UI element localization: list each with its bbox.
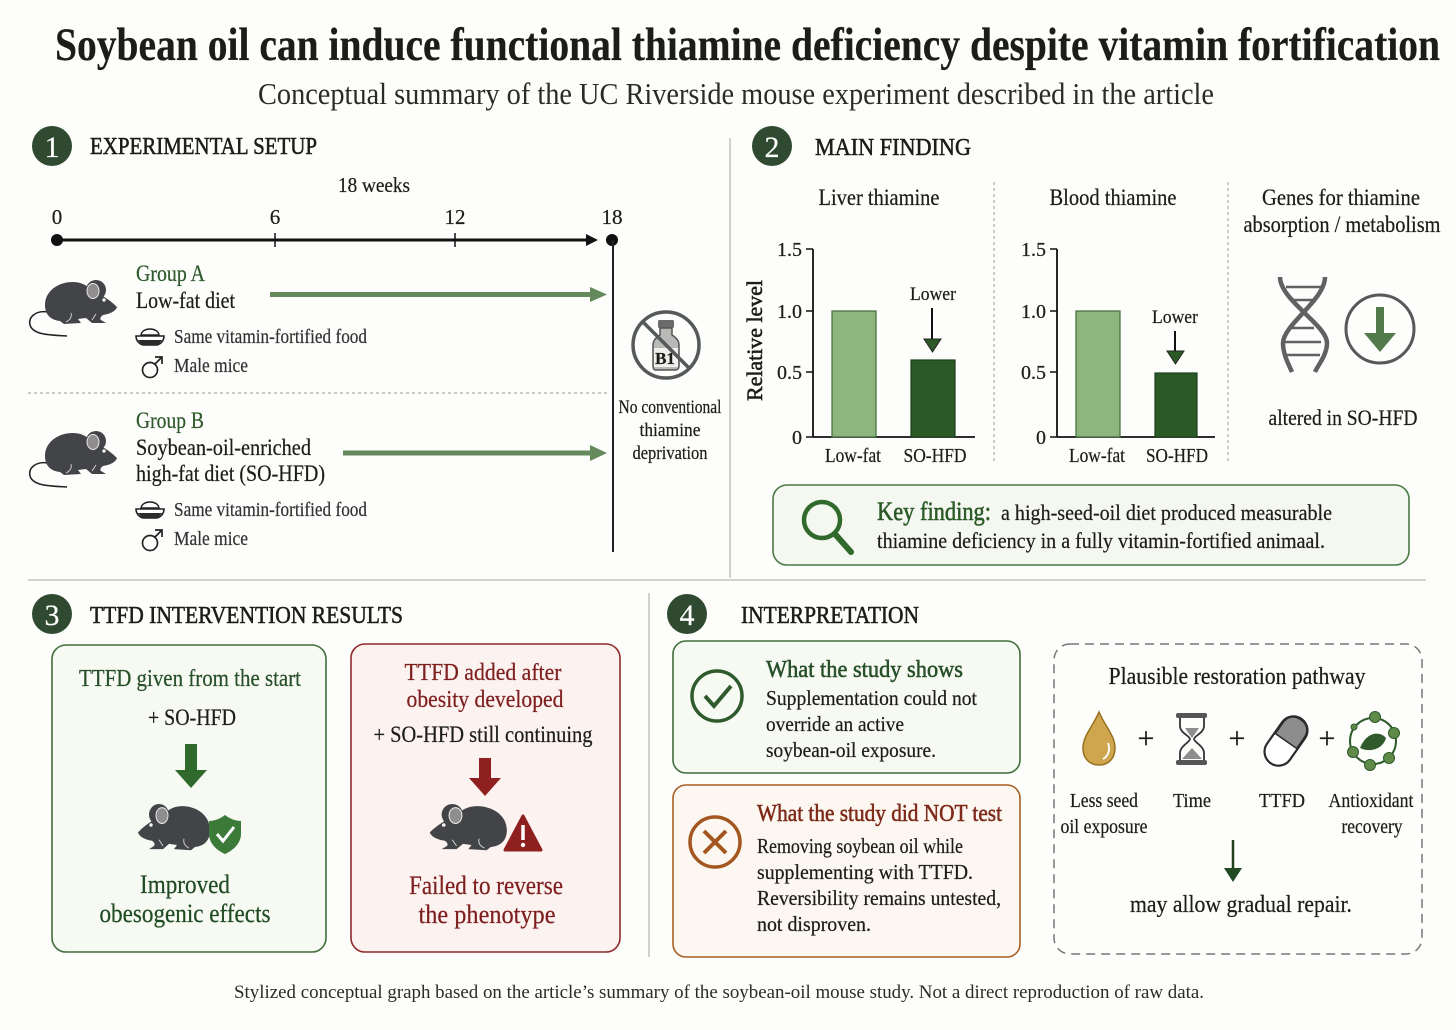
section number 4: 4 — [680, 599, 694, 632]
section number 4 — [667, 594, 707, 634]
sex note A: Male mice — [174, 355, 248, 377]
heading: main finding: MAIN FINDING — [815, 135, 971, 161]
timeline: 18 weeks — [338, 173, 410, 197]
food note A: Same vitamin-fortified food — [174, 326, 367, 348]
section number 2 — [752, 126, 792, 166]
icon: down arrow in circle — [1346, 295, 1414, 363]
note: no deprivation: deprivation — [632, 443, 708, 464]
chart: liver thiamine: 0.5 — [777, 362, 802, 384]
chart: liver thiamine: 0 — [792, 427, 802, 449]
heading: TTFD results: TTFD INTERVENTION RESULTS — [90, 603, 403, 629]
chart: blood thiamine: 0 — [1036, 427, 1046, 449]
pathway labels: Less seed — [1070, 790, 1138, 812]
arrow: group B duration — [343, 445, 607, 461]
bar: liver SO-HFD — [911, 360, 955, 437]
panel: interpretation — [667, 594, 1422, 957]
plus: + — [1138, 722, 1154, 755]
icon: DNA — [1280, 277, 1327, 372]
sex note B: Male mice — [174, 528, 248, 550]
card: TTFD after obesity — [351, 644, 620, 952]
arrow: liver lower: Lower — [910, 284, 957, 305]
note: no deprivation: thiamine — [640, 420, 700, 441]
note: no deprivation: No conventional — [618, 397, 722, 418]
icon: mouse A — [30, 280, 117, 336]
chart: blood thiamine — [1021, 185, 1215, 467]
bar: liver low-fat — [832, 311, 876, 437]
panel: main finding — [742, 126, 1441, 565]
arrow: blood lower: Lower — [1152, 307, 1199, 328]
panel: experimental setup — [28, 126, 722, 552]
group A label — [136, 261, 236, 313]
plus: + — [1229, 722, 1245, 755]
icon: cross — [690, 817, 740, 867]
card: what the study did not test: supplementing with TTFD. — [757, 860, 973, 884]
card: restoration pathway — [1054, 644, 1422, 954]
icon: capsule — [1259, 711, 1313, 771]
genes block: altered in SO-HFD — [1268, 405, 1418, 430]
group B label: Group B — [136, 408, 204, 433]
card: what the study shows: soybean-oil exposure. — [766, 738, 936, 762]
icon: no vitamin B1 — [633, 312, 699, 378]
icon: mouse with warning — [430, 804, 541, 850]
bar: blood low-fat — [1076, 311, 1120, 437]
card: restoration pathway: Plausible restoration pathway — [1108, 664, 1366, 690]
chart: liver thiamine: 1.0 — [777, 301, 802, 323]
timeline — [51, 173, 622, 552]
callout: key finding — [773, 485, 1409, 565]
group B — [30, 408, 607, 550]
timeline: 6 — [270, 205, 280, 229]
callout: key finding: thiamine deficiency in a fully vitamin-fortified animaal. — [877, 528, 1325, 553]
pathway labels: Time — [1173, 790, 1211, 812]
card: what the study shows — [673, 641, 1020, 773]
section number 1 — [32, 126, 72, 166]
food note B: Same vitamin-fortified food — [174, 499, 367, 521]
subtitle: Conceptual summary of the UC Riverside mouse experiment described in the article — [258, 76, 1214, 111]
callout: key finding: Key finding: — [877, 497, 991, 526]
genes block — [1244, 185, 1441, 430]
chart: blood thiamine: 1.5 — [1021, 239, 1046, 261]
chart: blood thiamine: Low-fat — [1069, 445, 1125, 467]
card: TTFD after obesity: TTFD added after — [404, 660, 562, 686]
group B label — [136, 408, 325, 486]
footnote: Stylized conceptual graph based on the article’s summary of the soybean-oil mouse study. Not a direct reproduction of raw data. — [234, 982, 1204, 1003]
icon: mouse B — [30, 431, 117, 487]
card: TTFD from start: Improved — [140, 870, 230, 899]
section number 1: 1 — [44, 131, 60, 164]
icon: antioxidant ring — [1348, 712, 1400, 770]
icon: male B — [142, 530, 162, 550]
note: no deprivation — [618, 397, 722, 464]
card: what the study did not test: Reversibility remains untested, — [757, 886, 1001, 910]
heading: experimental setup: EXPERIMENTAL SETUP — [90, 134, 317, 160]
arrow: blood lower — [1152, 307, 1199, 364]
icon: magnifier — [804, 502, 851, 552]
pathway labels: recovery — [1342, 816, 1402, 838]
chart: blood thiamine: Blood thiamine — [1050, 185, 1176, 210]
group B label: Soybean-oil-enriched — [136, 435, 311, 460]
y axis title: Relative level — [742, 280, 767, 401]
callout: key finding: a high-seed-oil diet produced measurable — [1001, 500, 1332, 525]
chart: liver thiamine: Liver thiamine — [818, 185, 940, 210]
card: what the study shows: What the study shows — [766, 657, 963, 683]
icon: bowl B — [136, 502, 164, 518]
section number 3: 3 — [44, 599, 60, 632]
bar: blood SO-HFD — [1155, 373, 1197, 437]
group A — [30, 261, 607, 378]
icon: male A — [142, 357, 162, 378]
card: TTFD from start: obesogenic effects — [100, 899, 270, 928]
arrow: down — [1224, 840, 1242, 882]
card: TTFD from start: TTFD given from the start — [79, 666, 301, 692]
card: restoration pathway: may allow gradual repair. — [1130, 892, 1352, 918]
card: what the study did not test: What the study did NOT test — [757, 801, 1002, 827]
plus: + — [1319, 722, 1335, 755]
genes block: Genes for thiamine — [1262, 185, 1420, 210]
card: what the study did not test: Removing soybean oil while — [757, 834, 963, 858]
section number 2: 2 — [764, 131, 780, 164]
icon: hourglass — [1176, 713, 1207, 765]
arrow: down green — [175, 744, 207, 788]
card: what the study shows: Supplementation could not — [766, 686, 977, 710]
section number 3 — [32, 594, 72, 634]
chart: liver thiamine — [777, 185, 975, 467]
timeline: 18 — [602, 205, 622, 229]
card: TTFD after obesity: the phenotype — [418, 900, 556, 929]
timeline: 0 — [52, 205, 62, 229]
chart: blood thiamine: SO-HFD — [1146, 445, 1208, 467]
card: TTFD after obesity: Failed to reverse — [409, 871, 563, 900]
arrow: liver lower — [910, 284, 957, 352]
card: TTFD from start: + SO-HFD — [148, 705, 236, 730]
chart: liver thiamine: SO-HFD — [904, 445, 966, 467]
pathway labels: oil exposure — [1060, 816, 1148, 838]
card: what the study did not test — [673, 785, 1020, 957]
chart: blood thiamine: 1.0 — [1021, 301, 1046, 323]
chart: liver thiamine: Low-fat — [825, 445, 881, 467]
card: what the study shows: override an active — [766, 712, 904, 736]
card: TTFD after obesity: obesity developed — [406, 687, 564, 713]
pathway labels: Antioxidant — [1328, 790, 1414, 812]
arrow: down red — [469, 758, 501, 796]
card: TTFD from start — [52, 645, 326, 952]
group A label: Low-fat diet — [136, 288, 236, 313]
icon: oil drop — [1083, 712, 1115, 765]
timeline: 12 — [444, 205, 466, 229]
pathway labels — [1060, 790, 1414, 838]
card: TTFD after obesity: + SO-HFD still continuing — [374, 722, 593, 747]
chart: blood thiamine: 0.5 — [1021, 362, 1046, 384]
group B label: high-fat diet (SO-HFD) — [136, 461, 325, 486]
icon: no vitamin B1: B1 — [655, 349, 675, 368]
heading: interpretation: INTERPRETATION — [741, 603, 919, 629]
arrow: group A duration — [270, 287, 607, 302]
chart: liver thiamine: 1.5 — [777, 239, 802, 261]
icon: mouse with shield — [138, 804, 241, 854]
icon: check — [692, 671, 742, 721]
card: what the study did not test: not disproven. — [757, 912, 871, 936]
pathway labels: TTFD — [1259, 790, 1305, 812]
panel: TTFD intervention results — [32, 594, 620, 952]
group A label: Group A — [136, 261, 205, 286]
icon: bowl A — [136, 329, 164, 345]
